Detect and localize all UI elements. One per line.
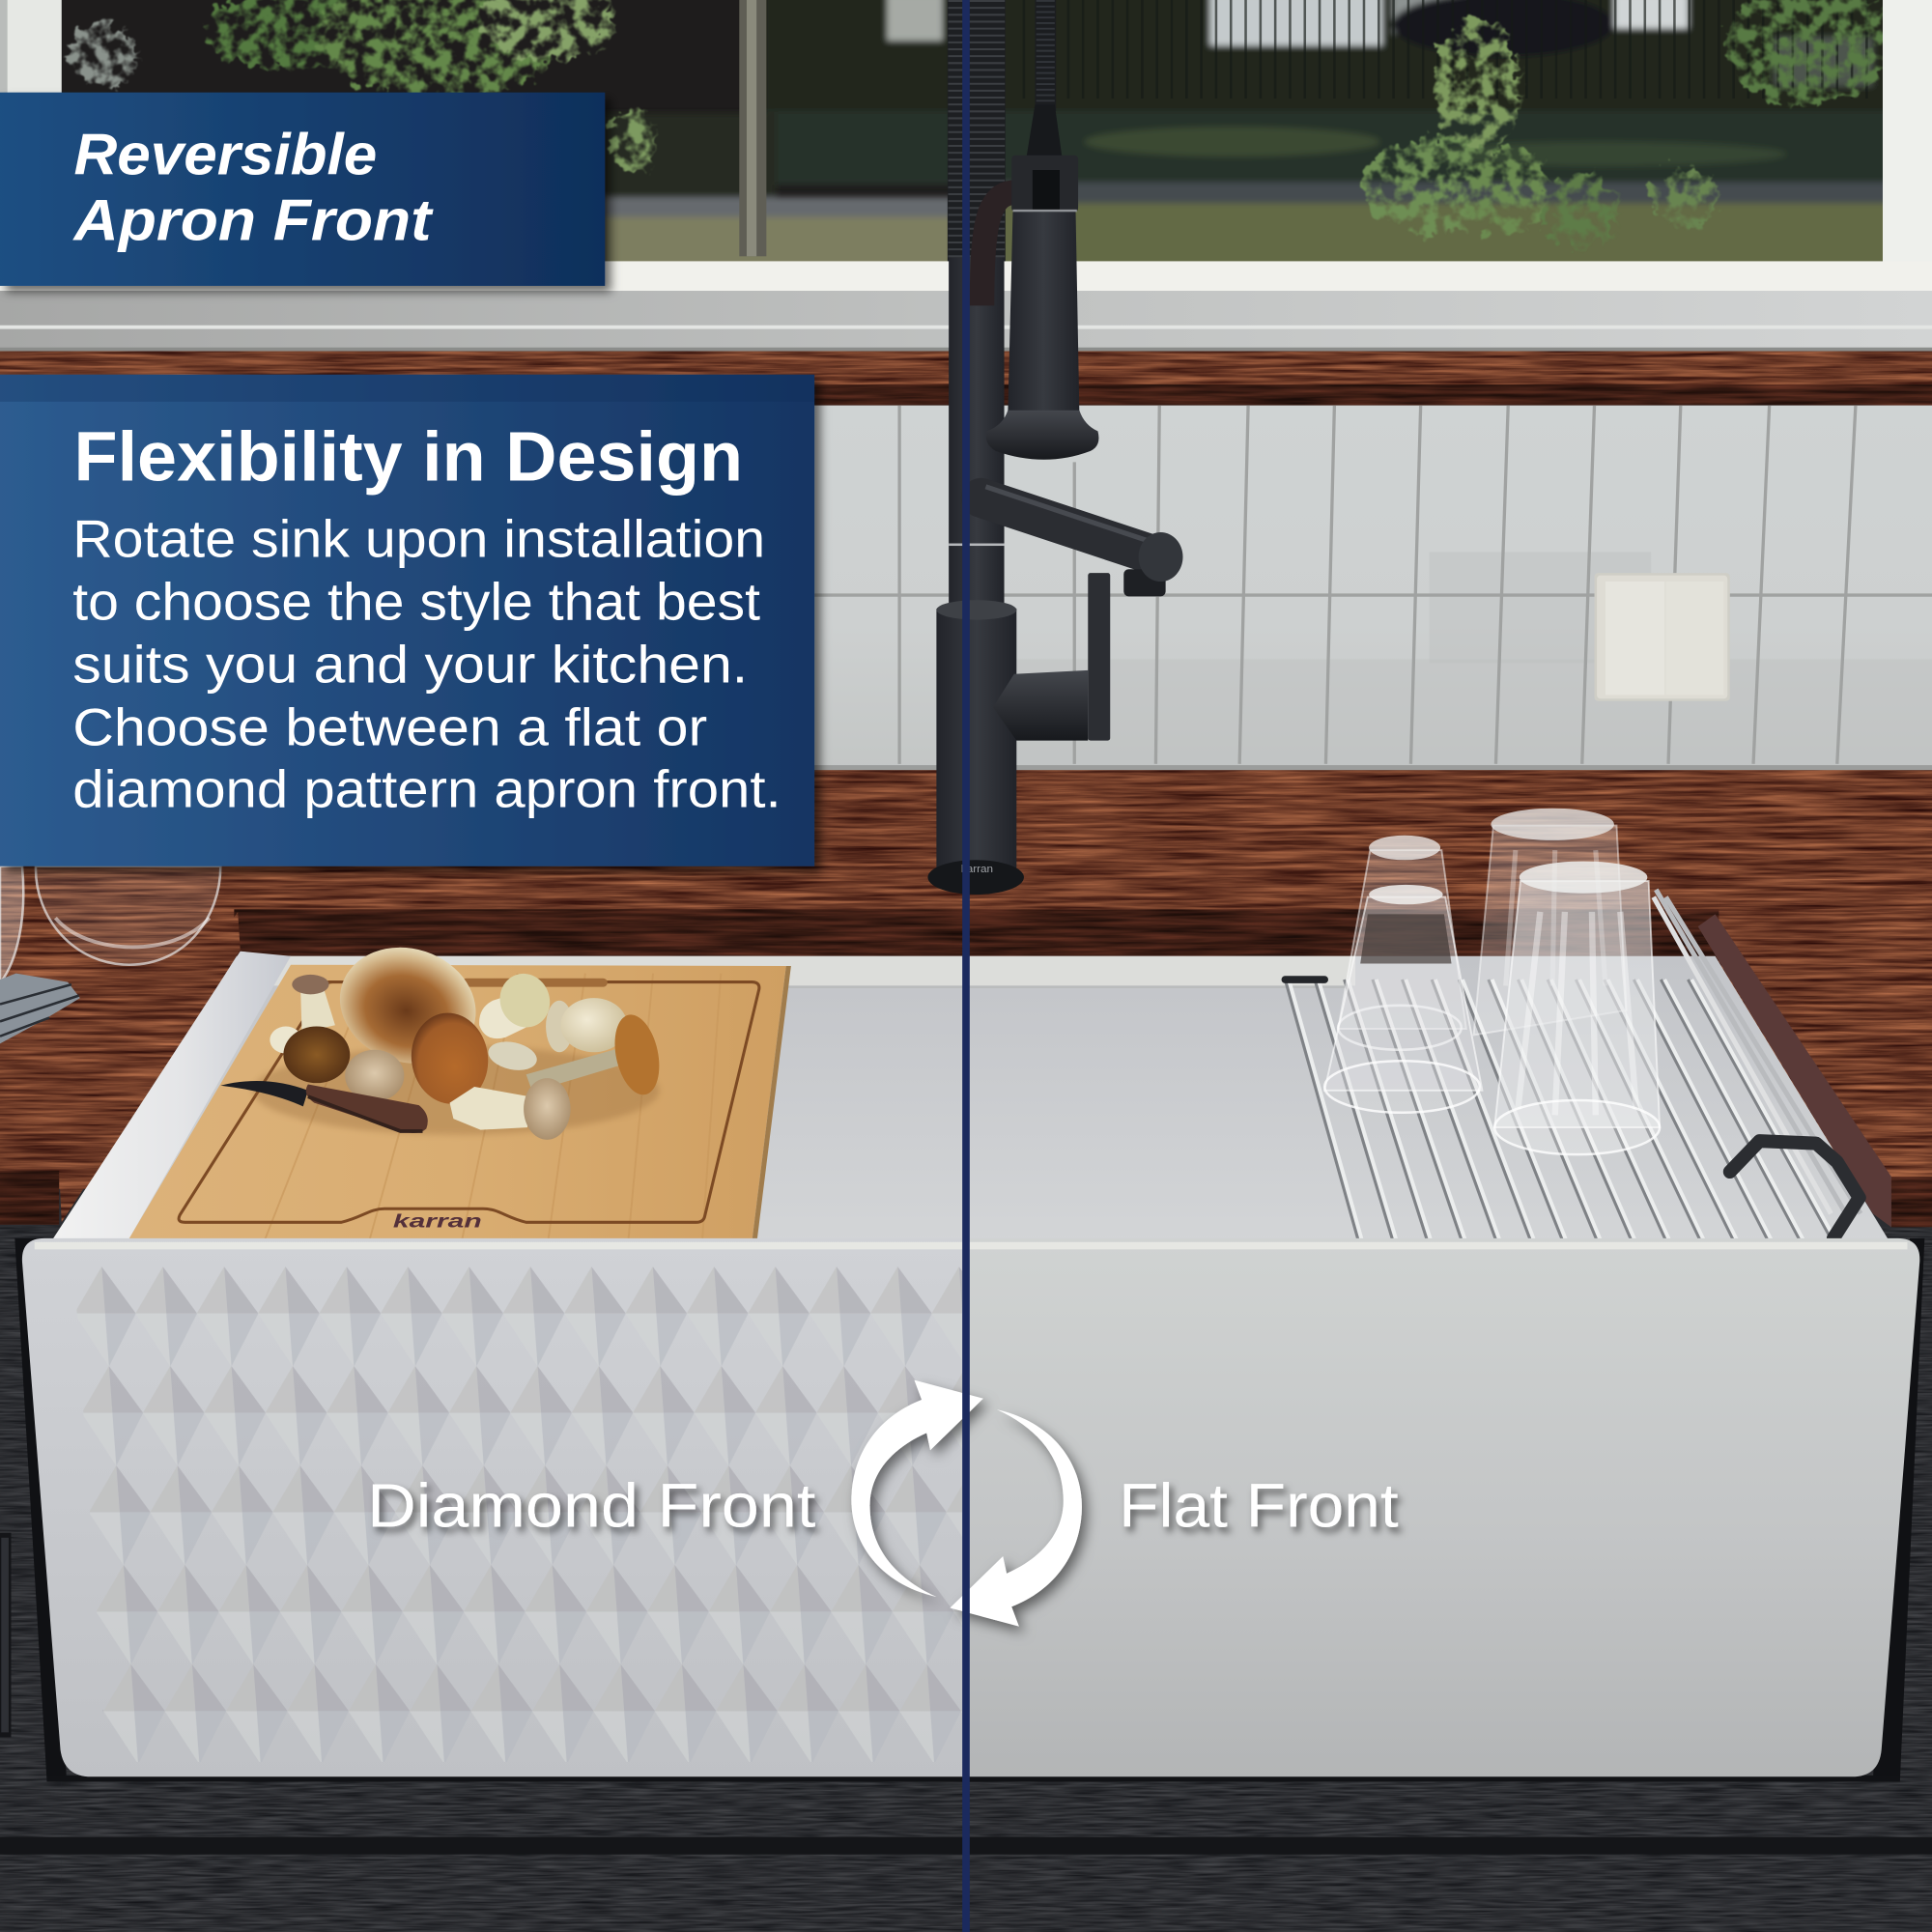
roll-up end bars (1656, 890, 1861, 1213)
body text (72, 509, 781, 818)
glass front left (1324, 885, 1482, 1113)
glass back left (1338, 836, 1466, 1050)
rim highlight (35, 1243, 1907, 1249)
tile backsplash (0, 406, 1932, 771)
faucet: karran (961, 864, 993, 875)
spout (980, 487, 1182, 596)
foot (927, 860, 1024, 895)
body text: Rotate sink upon installation (72, 509, 765, 569)
rotation arrows (851, 1380, 1082, 1627)
logo: karran (393, 1211, 482, 1232)
spray head (986, 156, 1098, 460)
folded cloth (0, 974, 80, 1043)
body (936, 609, 1016, 873)
groove (179, 982, 759, 1222)
cabinet (0, 1225, 1932, 1932)
wall switch (1595, 573, 1730, 701)
glass front right (1494, 862, 1660, 1154)
title text (71, 122, 435, 253)
juice slot (462, 979, 608, 987)
panel: flexibility in design (0, 375, 814, 867)
sink apron: diamond and flat (22, 1238, 1919, 1776)
wood countertop (0, 770, 1932, 1227)
flat half (966, 1238, 1919, 1776)
title text: Reversible (74, 122, 377, 186)
diamond pattern (74, 1266, 962, 1762)
black handle clip (1730, 1141, 1860, 1238)
faucet (927, 0, 1182, 895)
glasses (1324, 809, 1660, 1154)
glass back right (1474, 809, 1627, 1035)
panel: title (0, 93, 605, 286)
mushrooms and knife (220, 930, 666, 1140)
window frame and sill (0, 0, 1932, 352)
wooden shelf (0, 352, 1932, 406)
diamond half (22, 1238, 966, 1776)
pipe (949, 258, 1005, 614)
window view outside (0, 0, 1932, 291)
knife (220, 1081, 428, 1133)
sink interior (49, 952, 1891, 1244)
cutting board (126, 965, 791, 1244)
body text: to choose the style that best (72, 572, 760, 632)
title text: Apron Front (71, 188, 435, 253)
cut edge of counter (59, 912, 1891, 1227)
wine glass on counter (0, 867, 220, 983)
coiled spring (948, 0, 1006, 261)
lever (993, 573, 1110, 741)
body text: Choose between a flat or (72, 697, 707, 757)
label: diamond front: Diamond Front (367, 1470, 816, 1540)
arrow: right (950, 1409, 1082, 1627)
body text: diamond pattern apron front. (72, 758, 781, 818)
black back clip (1285, 977, 1324, 982)
drying rack (1285, 890, 1861, 1243)
arrow: left (851, 1380, 983, 1597)
center divider line (962, 0, 970, 1932)
heading: Flexibility in Design (74, 417, 743, 496)
label: flat front: Flat Front (1119, 1470, 1399, 1540)
hose top (1026, 0, 1062, 157)
body text: suits you and your kitchen. (72, 635, 748, 695)
hose arch (982, 192, 1016, 305)
